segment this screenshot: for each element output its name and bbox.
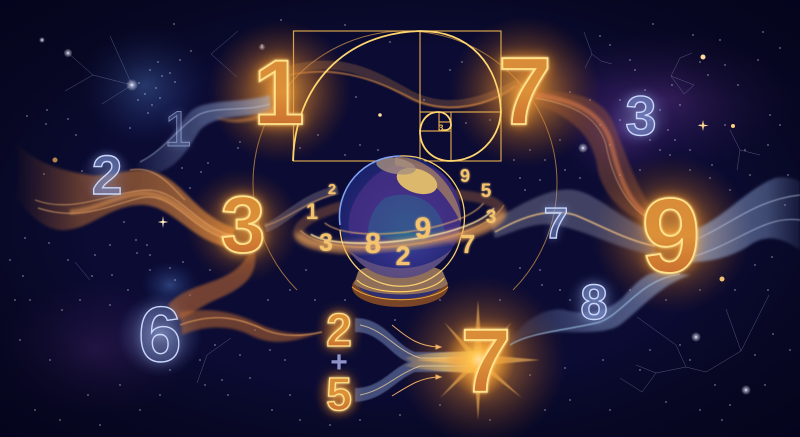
numbers orbiting ball: 9 [460, 166, 470, 186]
numbers orbiting ball: 9 [415, 212, 431, 245]
flow: ribbon from 3 to ball [265, 190, 338, 228]
arrows to 7 [392, 325, 441, 396]
digit 7 result: 7 [461, 312, 511, 412]
small digits: blue [92, 84, 657, 378]
flow: orange ribbons from 6 to 3 and to 2 [168, 250, 322, 342]
numbers orbiting ball: 3 [486, 207, 496, 228]
large thin circle [253, 31, 557, 290]
flow: blue ribbon right of 9 [690, 177, 800, 262]
crystal ball base [352, 264, 448, 307]
numbers orbiting ball: 5 [481, 181, 492, 202]
digit 5 sum: 5 [326, 368, 352, 420]
flow: orange ribbon from far left to 3 [14, 140, 235, 248]
constellations [65, 31, 769, 392]
digit 6 blue: 6 [138, 290, 182, 378]
numbers orbiting ball: 3 [319, 229, 333, 257]
crystal ball [339, 155, 470, 286]
large digits: gold [221, 38, 700, 420]
digit 8 blue: 8 [580, 276, 608, 330]
numbers orbiting ball: 2 [395, 241, 411, 271]
numbers orbiting ball: 7 [461, 229, 475, 259]
orbit rings behind ball [296, 185, 504, 259]
digit 7 gold top: 7 [498, 38, 552, 145]
burst behind 7 [416, 300, 540, 420]
digit 7 blue: 7 [544, 199, 568, 248]
bright stars [39, 37, 751, 395]
flow: ribbon from ball to 9 [490, 189, 655, 255]
numbers orbiting ball: 8 [365, 228, 381, 260]
digit 9 gold: 9 [642, 177, 700, 295]
fibonacci spiral: 3 [438, 123, 444, 133]
digit 2 sum: 2 [326, 304, 352, 356]
flow: ribbon from 1 to 7 through spiral [290, 65, 520, 107]
numbers orbiting ball: 2 [328, 181, 336, 198]
digit 2 blue: 2 [92, 144, 122, 206]
numbers orbiting ball [306, 166, 496, 271]
flow: orange ribbon from 7 to 9 [530, 90, 650, 222]
fibonacci spiral [293, 31, 501, 161]
orbit rings in front of ball [298, 201, 507, 256]
digit 1 gold: 1 [253, 42, 305, 144]
addition ribbons into 7 [355, 318, 480, 402]
digit 3 blue: 3 [625, 84, 657, 147]
flow: blue ribbon from 7 via 8 to 9 [505, 272, 690, 348]
digit 3 gold: 3 [221, 180, 265, 269]
digit 1 blue: 1 [164, 101, 192, 157]
flow: blue ribbon from 1 to left [135, 95, 272, 172]
plus sign: + [330, 346, 348, 379]
numbers orbiting ball: 1 [306, 199, 318, 224]
